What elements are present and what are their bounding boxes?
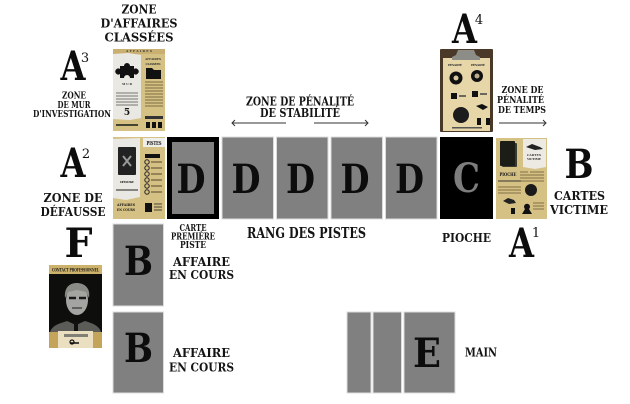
label: A2: A [60,140,86,187]
heading: zone de pénalité de stabilité: DE STABILITÉ [260,105,340,120]
heading: zone d'affaires classées: ZONE [122,2,156,16]
card: D [222,137,274,219]
card: A3 mur d'investigation / affaires classées: MUR [122,82,132,86]
label: zone de pénalité de temps: ZONE DE [502,86,544,96]
label: zone de défausse: DÉFAUSSE [40,204,106,219]
label: zone de pénalité de temps: PÉNALITÉ [497,94,544,106]
card: D [331,137,382,219]
label: zone de mur d'investigation: D'INVESTIGATION [33,110,111,120]
card: F contact professionnel: CONTACT PROFESSIONNEL [52,268,99,272]
card: A4 clipboard [440,49,493,132]
card: A2 défausse / pistes [113,137,165,219]
heading: zone de pénalité de stabilité [246,94,354,120]
heading: zone d'affaires classées: CLASSÉES [104,30,174,44]
card: C pioche [440,137,493,219]
card: B top: B [124,238,153,285]
label: zone de mur d'investigation: DE MUR [58,101,91,111]
card: D: D [232,156,260,203]
card: A4 clipboard: PÉNALITÉ [448,62,463,67]
label: affaire en cours top: AFFAIRE [172,254,230,269]
card: A1 pioche / cartes victime: CARTES [527,153,541,157]
card: D première piste, black frame [167,137,219,219]
arrow: right time [499,120,546,126]
label: zone de mur d'investigation: ZONE [62,92,86,102]
label: A4: A [451,6,478,53]
label: zone de pénalité de temps: DE TEMPS [498,106,546,116]
card: A2 défausse / pistes: PISTES [146,141,162,147]
card: A2 défausse / pistes: EN COURS [117,208,135,212]
card: A2 défausse / pistes: DÉFAUSSE [120,179,135,184]
label: affaire en cours bottom: AFFAIRE [172,345,230,360]
card: F contact professionnel [49,265,102,348]
card: A4 clipboard: PÉNALITÉ [471,62,486,67]
card: A2 défausse / pistes: AFFAIRES [116,203,135,207]
label: A1: A [508,220,535,267]
label: A3: 3 [81,51,89,66]
label: affaire en cours top: EN COURS [169,267,234,282]
label: B cartes victime letter: B [564,141,594,188]
label: A4: 4 [475,13,483,28]
label: carte première piste: PISTE [180,241,206,251]
card: B bottom: B [124,325,153,372]
card: A1 pioche / cartes victime [496,138,547,219]
label: cartes victime: CARTES [554,188,605,203]
card: D: D [340,156,370,203]
label: carte première piste: PREMIÈRE [171,230,215,242]
heading: zone d'affaires classées: D'AFFAIRES [100,16,178,30]
label: carte première piste [171,224,215,251]
card: A3 mur d'investigation / affaires classées: AFFAIRES [125,49,152,53]
hand cards: E [347,312,455,393]
label: carte première piste: CARTE [180,224,207,234]
card: A1 pioche / cartes victime: PIOCHE [500,172,517,178]
label: zone de pénalité de temps [497,86,546,116]
card: D [276,137,328,219]
label: zone de mur d'investigation [33,92,111,120]
card: D [386,137,437,219]
label: cartes victime: VICTIME [549,202,608,217]
label: rang des pistes: RANG DES PISTES [247,225,366,242]
card: A1 pioche / cartes victime: VICTIME [526,157,542,161]
label: main: MAIN [465,344,497,360]
card: A3 mur d'investigation / affaires classées: AFFAIRES [144,57,161,61]
label: affaire en cours bottom [169,345,234,374]
card: B bottom [113,312,164,393]
icon: puzzle piece [115,63,139,78]
heading: zone d'affaires classées [100,2,178,44]
card: C pioche: C [453,155,480,202]
hand cards: E: E [413,330,441,377]
icon: folder [146,68,161,79]
label: affaire en cours top [169,254,234,282]
label: cartes victime [549,188,608,217]
card: B top [113,224,164,306]
arrow: right [314,120,368,126]
label: A1: 1 [532,226,540,241]
label: zone de défausse [40,190,106,219]
card: A3 mur d'investigation / affaires classées [113,49,165,131]
heading: zone de pénalité de stabilité: ZONE DE PÉNALITÉ [246,94,354,108]
card: D: D [395,156,424,203]
label: affaire en cours bottom: EN COURS [169,360,234,374]
label: F: F [64,220,92,267]
arrow: left [232,120,286,126]
label: A3: A [60,43,86,90]
card: A3 mur d'investigation / affaires classées: CLASSÉES [146,61,160,66]
label: A2: 2 [82,147,90,162]
card: A3 mur d'investigation / affaires classées: 5 [124,108,130,118]
label: zone de défausse: ZONE DE [44,190,102,205]
label: pioche: PIOCHE [442,230,491,245]
card: D première piste, black frame: D [176,156,206,203]
card: D: D [286,156,315,203]
